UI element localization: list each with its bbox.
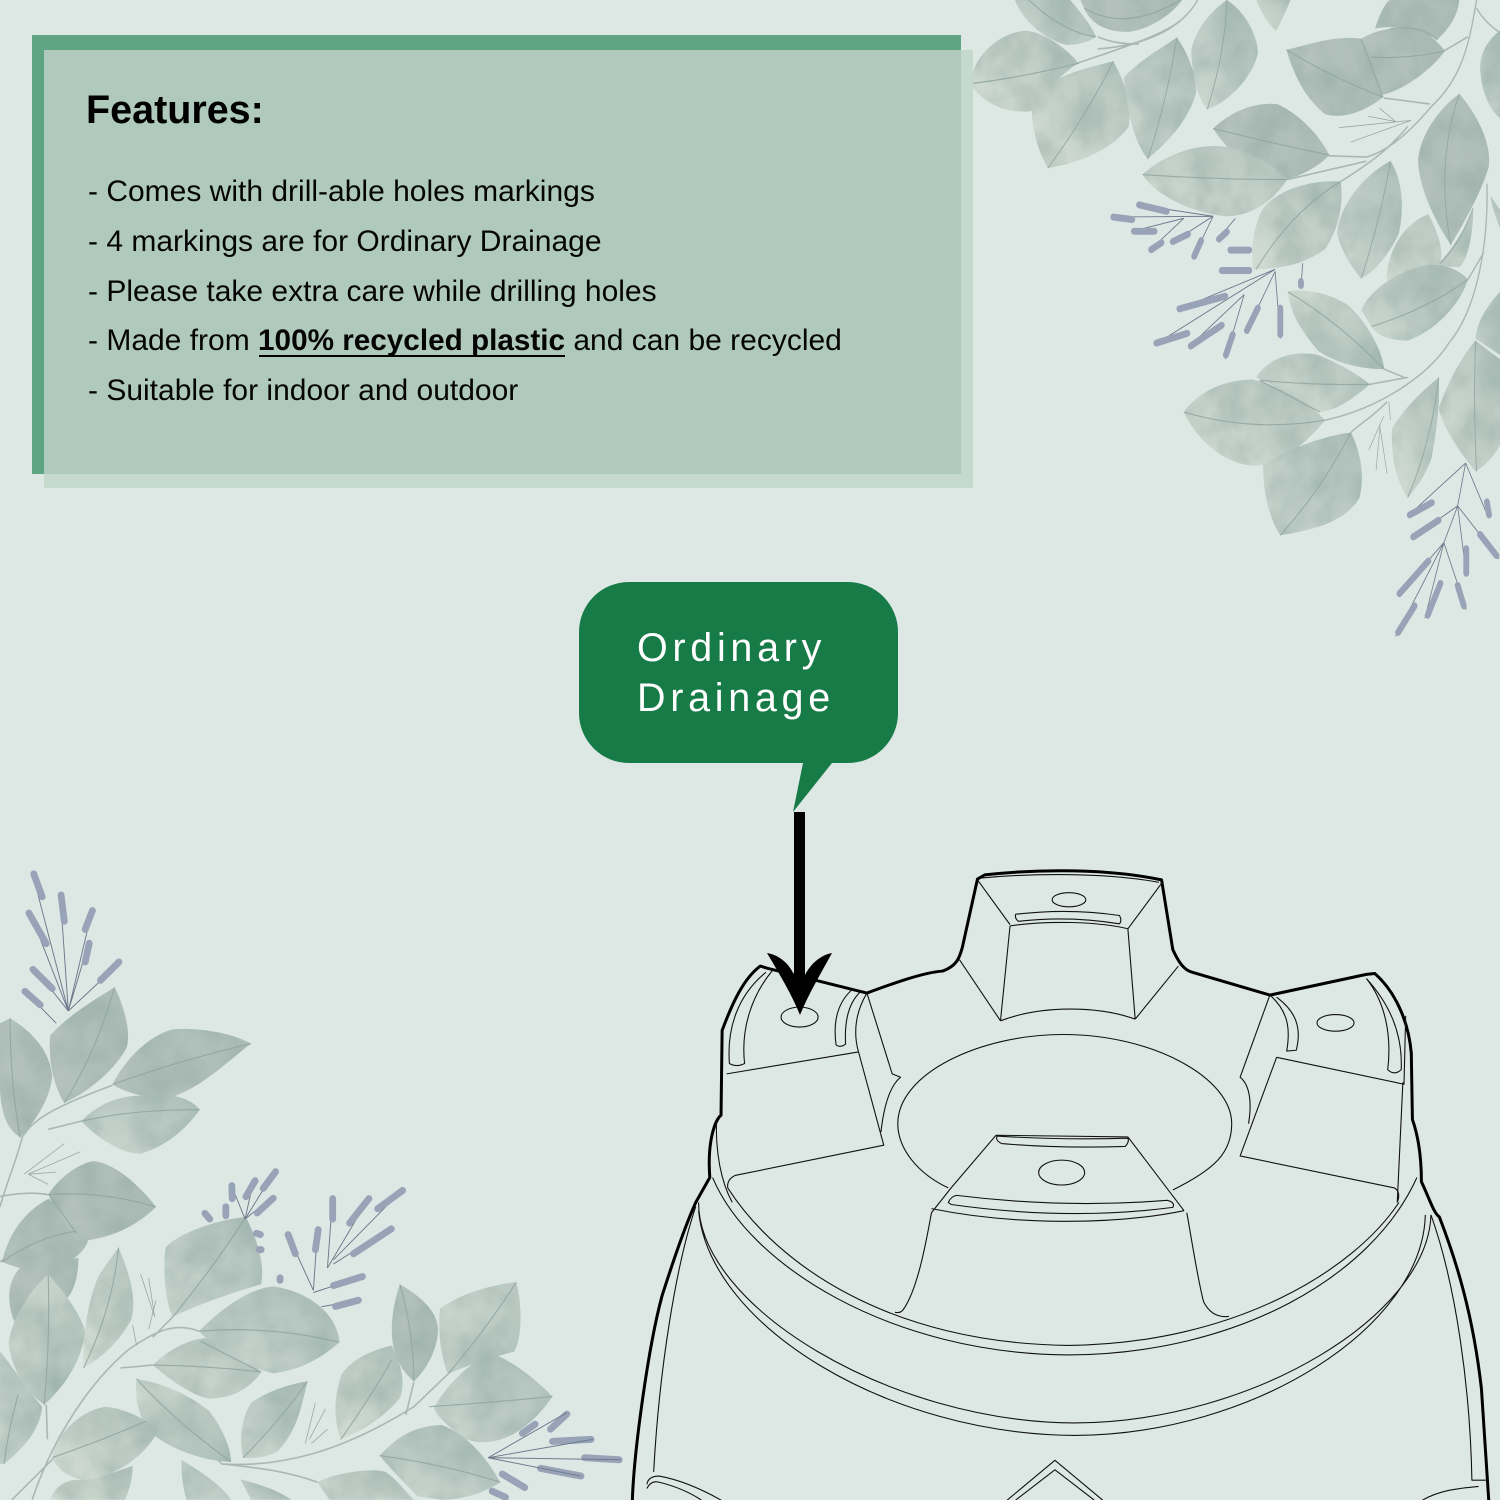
stems: bottom left	[0, 1085, 448, 1500]
seed stalks: top right	[1339, 108, 1411, 473]
feature line 1: - Comes with drill-able holes markings	[88, 175, 595, 208]
planter outline	[632, 871, 1489, 1500]
drill hole marking: front	[1039, 1160, 1085, 1185]
right tab	[1240, 979, 1406, 1202]
panel body	[44, 50, 961, 474]
speech bubble	[579, 582, 898, 812]
feature line 5: - Suitable for indoor and outdoor	[88, 374, 518, 407]
panel accent frame	[32, 35, 961, 474]
front tab	[895, 1135, 1229, 1317]
seed stalks: bottom left	[24, 1144, 327, 1443]
blue sprigs: top right	[1112, 205, 1499, 636]
heading: features: Features:	[86, 88, 264, 132]
leaf cluster: top right	[970, 0, 1500, 636]
planter line drawing	[632, 871, 1489, 1500]
drill hole marking: left	[781, 1007, 818, 1027]
feature line 2: - 4 markings are for Ordinary Drainage	[88, 225, 602, 258]
panel shadow	[44, 50, 973, 488]
centre well	[898, 1034, 1232, 1190]
rim and bands	[654, 1082, 1487, 1480]
back tab	[960, 875, 1178, 1021]
stems: top right	[1077, 0, 1500, 432]
feature line 4: - Made from 100% recycled plastic and can be recycled	[88, 324, 842, 357]
arrow: to drainage hole	[767, 812, 832, 1015]
drill hole marking: back	[1052, 893, 1086, 907]
feature list	[88, 175, 842, 407]
drill hole marking: right	[1317, 1015, 1354, 1031]
left tab	[727, 970, 901, 1188]
leaves: top right	[970, 0, 1500, 535]
underline	[259, 355, 565, 357]
feature line 3: - Please take extra care while drilling holes	[88, 275, 657, 308]
blue sprigs: bottom left	[24, 872, 621, 1497]
lower body details	[647, 1460, 1479, 1500]
callout: ordinary drainage	[579, 582, 898, 812]
panel: features	[32, 35, 973, 488]
callout text line 2: Drainage	[637, 676, 835, 720]
leaf cluster: bottom left	[0, 872, 621, 1500]
callout text: Ordinary	[637, 626, 826, 670]
leaves: bottom left	[0, 987, 552, 1500]
